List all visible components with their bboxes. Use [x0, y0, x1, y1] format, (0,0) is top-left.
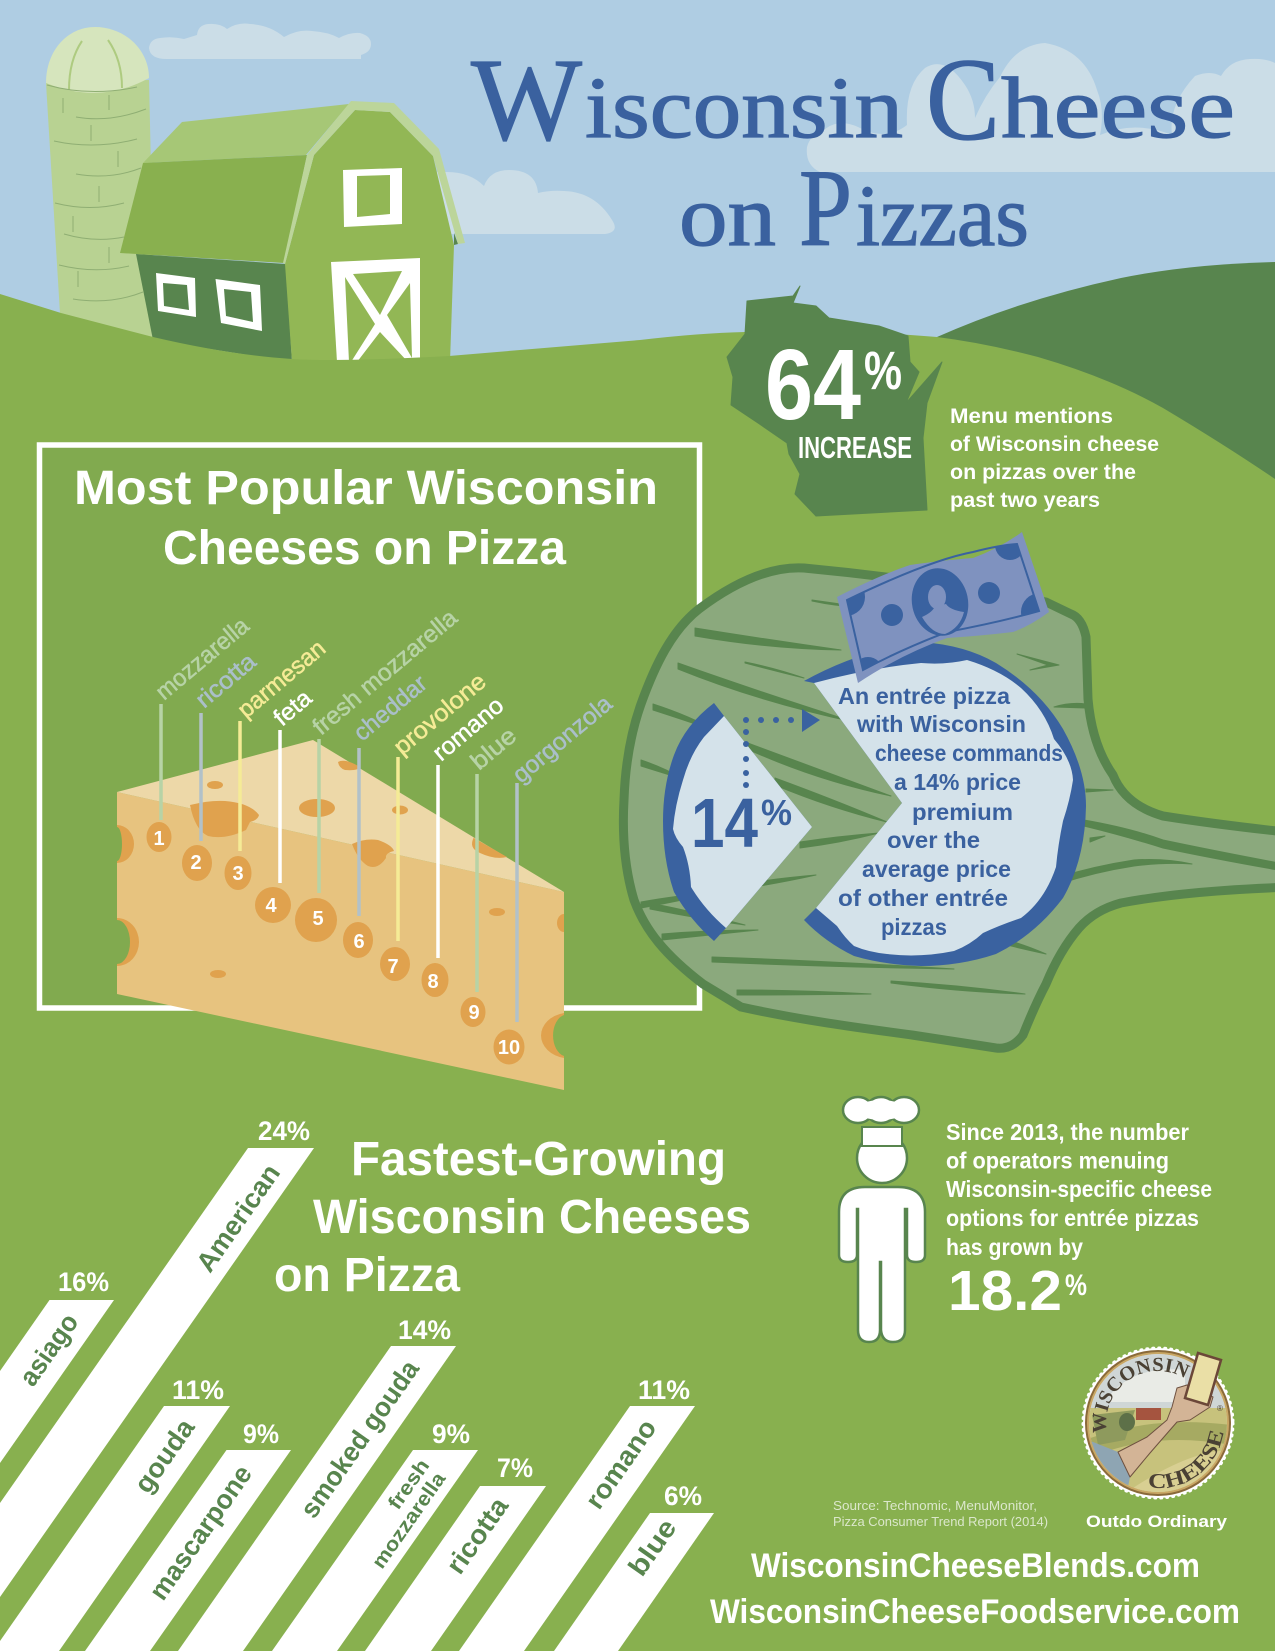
heading: fastest-growing	[274, 1133, 751, 1302]
panel: most popular cheeses frame	[40, 445, 700, 1008]
cheese name labels: provolone	[389, 668, 492, 761]
price premium text: pizzas	[881, 914, 947, 940]
rank numbers: 4	[265, 895, 277, 917]
cheese name labels	[151, 604, 618, 789]
cheese name labels: gorgonzola	[508, 690, 618, 789]
stat: operators text: Since 2013, the number	[946, 1119, 1189, 1145]
rank numbers: 3	[232, 863, 244, 885]
bar names: mascarpone	[143, 1460, 258, 1605]
title: C	[926, 34, 1000, 165]
value labels	[58, 1116, 702, 1511]
cheese holes	[117, 761, 564, 1064]
clouds	[149, 24, 1275, 234]
title: isconsin	[585, 59, 903, 156]
title: W	[471, 34, 583, 165]
cheese name labels: fresh mozzarella	[308, 604, 463, 741]
logo: Wisconsin Cheese seal: ®	[1217, 1404, 1223, 1413]
arm in seal	[1118, 1385, 1213, 1477]
stat: operators text: has grown by	[946, 1234, 1083, 1260]
price premium text: of other entrée	[838, 885, 1008, 911]
rank numbers: 5	[312, 908, 324, 930]
rank numbers: 7	[387, 956, 399, 978]
icon: Wisconsin state map	[727, 286, 942, 516]
price premium text: with Wisconsin	[856, 711, 1026, 737]
stat: operators text: options for entrée pizzas	[946, 1205, 1199, 1231]
rank numbers	[153, 828, 520, 1059]
value labels: 11%	[172, 1375, 224, 1405]
bars	[0, 1148, 714, 1651]
bar names	[13, 1159, 682, 1605]
heading: fastest-growing: Wisconsin Cheeses	[313, 1191, 751, 1244]
website URLs: WisconsinCheeseFoodservice.com	[710, 1593, 1240, 1631]
bar names: blue	[622, 1513, 682, 1581]
dotted arrow right	[743, 709, 820, 788]
price premium text: cheese commands	[875, 740, 1063, 766]
price premium text: average price	[862, 856, 1011, 882]
cheese name labels: romano	[428, 692, 509, 767]
source note	[833, 1499, 1048, 1529]
icon: dollar bill	[837, 532, 1049, 683]
heading: most popular: Cheeses on Pizza	[163, 522, 566, 575]
value labels: 11%	[638, 1375, 690, 1405]
rank numbers: 9	[468, 1002, 480, 1024]
value labels: 9%	[243, 1419, 279, 1449]
stat: operators text: 18.2	[948, 1259, 1062, 1323]
bar names: fresh	[384, 1455, 434, 1514]
cheese front face	[117, 792, 564, 1090]
barn side windows	[156, 273, 262, 331]
icon: wooden pizza peel	[623, 568, 1275, 1048]
stat: 14%: 14	[691, 784, 758, 862]
value labels: 24%	[258, 1116, 310, 1146]
seal lettering: WISCONSIN	[1092, 1358, 1190, 1433]
value labels: 14%	[398, 1315, 451, 1345]
price premium text	[838, 683, 1063, 940]
stat: 64% increase: of Wisconsin cheese	[950, 433, 1159, 456]
stat: operators text: Wisconsin-specific cheese	[946, 1176, 1212, 1202]
bar names: ricotta	[440, 1491, 515, 1579]
bar names: gouda	[128, 1412, 201, 1498]
stat: operators text	[946, 1119, 1212, 1323]
rank numbers: 2	[190, 852, 202, 874]
bar names: American	[190, 1159, 286, 1277]
rank numbers: 8	[427, 971, 439, 993]
title: P	[799, 147, 852, 269]
pizza slice	[673, 716, 812, 928]
cheese name labels: mozzarella	[151, 612, 255, 706]
cheese top face	[117, 740, 564, 892]
stat: 64% increase	[727, 286, 1159, 516]
bar names: asiago	[13, 1308, 84, 1391]
silo	[46, 27, 155, 345]
bar names: smoked gouda	[294, 1354, 426, 1523]
sky background	[0, 0, 1275, 700]
source note: Source: Technomic, MenuMonitor,	[833, 1499, 1037, 1513]
price premium text: over the	[887, 827, 980, 853]
value labels: 9%	[432, 1419, 470, 1449]
stat: operators text: of operators menuing	[946, 1148, 1169, 1174]
stat: 64% increase: 64	[765, 329, 861, 441]
cheese name labels: ricotta	[191, 647, 262, 714]
website URLs: WisconsinCheeseBlends.com	[751, 1547, 1200, 1585]
logo: Wisconsin Cheese seal	[1082, 1346, 1234, 1500]
icon: chef figure	[839, 1097, 925, 1342]
cheese in seal	[1185, 1353, 1221, 1405]
panel: pizza peel with price premium	[623, 530, 1275, 1048]
pizza body ring	[804, 642, 1086, 966]
bar names: mozzarella	[368, 1468, 451, 1573]
title: on	[679, 167, 776, 264]
heading: most popular	[74, 462, 658, 575]
logo: Wisconsin Cheese seal: CHEESE	[1149, 1430, 1224, 1488]
stat: 14%: %	[761, 792, 792, 833]
value labels: 6%	[664, 1481, 702, 1511]
stat: 64% increase: past two years	[950, 489, 1100, 512]
heading: most popular: Most Popular Wisconsin	[74, 462, 658, 515]
tagline: Outdo Ordinary: Outdo Ordinary	[1086, 1512, 1228, 1531]
stat: 64% increase: on pizzas over the	[950, 461, 1136, 484]
heading: fastest-growing: on Pizza	[274, 1249, 460, 1302]
bar chart: fastest-growing cheeses	[0, 1116, 714, 1651]
title	[471, 34, 1235, 269]
source note: Pizza Consumer Trend Report (2014)	[833, 1515, 1048, 1529]
pizza body	[814, 660, 1073, 955]
wood grain	[641, 600, 1275, 995]
cheese name labels: cheddar	[349, 670, 433, 747]
barn loft window	[343, 168, 402, 227]
title: heese	[1001, 59, 1235, 156]
barn door	[331, 258, 420, 362]
dark back hill	[937, 262, 1275, 520]
sleeve in seal	[1092, 1442, 1130, 1486]
barn in seal	[1136, 1408, 1161, 1420]
price premium text: a 14% price	[894, 769, 1021, 795]
stat: 64% increase: INCREASE	[798, 430, 912, 465]
barn	[120, 101, 465, 362]
title: izzas	[856, 167, 1029, 264]
bar names: romano	[579, 1414, 662, 1514]
stat: 64% increase: Menu mentions	[950, 405, 1113, 428]
rank pointer lines	[161, 704, 517, 1022]
heading: fastest-growing: Fastest-Growing	[351, 1133, 726, 1186]
cheese name labels: blue	[466, 722, 522, 776]
rank numbers: 10	[498, 1037, 520, 1059]
pizza slice ring	[663, 703, 812, 941]
value labels: 16%	[58, 1267, 109, 1297]
stat: 64% increase: %	[864, 341, 902, 401]
cheese name labels: parmesan	[233, 635, 331, 724]
price premium text: premium	[912, 799, 1013, 825]
rank numbers: 1	[153, 828, 165, 850]
cheese name labels: feta	[269, 684, 318, 732]
price premium text: An entrée pizza	[838, 683, 1010, 709]
stat: operators text: %	[1065, 1269, 1087, 1302]
rank numbers: 6	[353, 931, 365, 953]
value labels: 7%	[497, 1453, 533, 1483]
illustration: cheese wedge with ranked list	[117, 604, 618, 1090]
website URLs	[710, 1547, 1240, 1631]
